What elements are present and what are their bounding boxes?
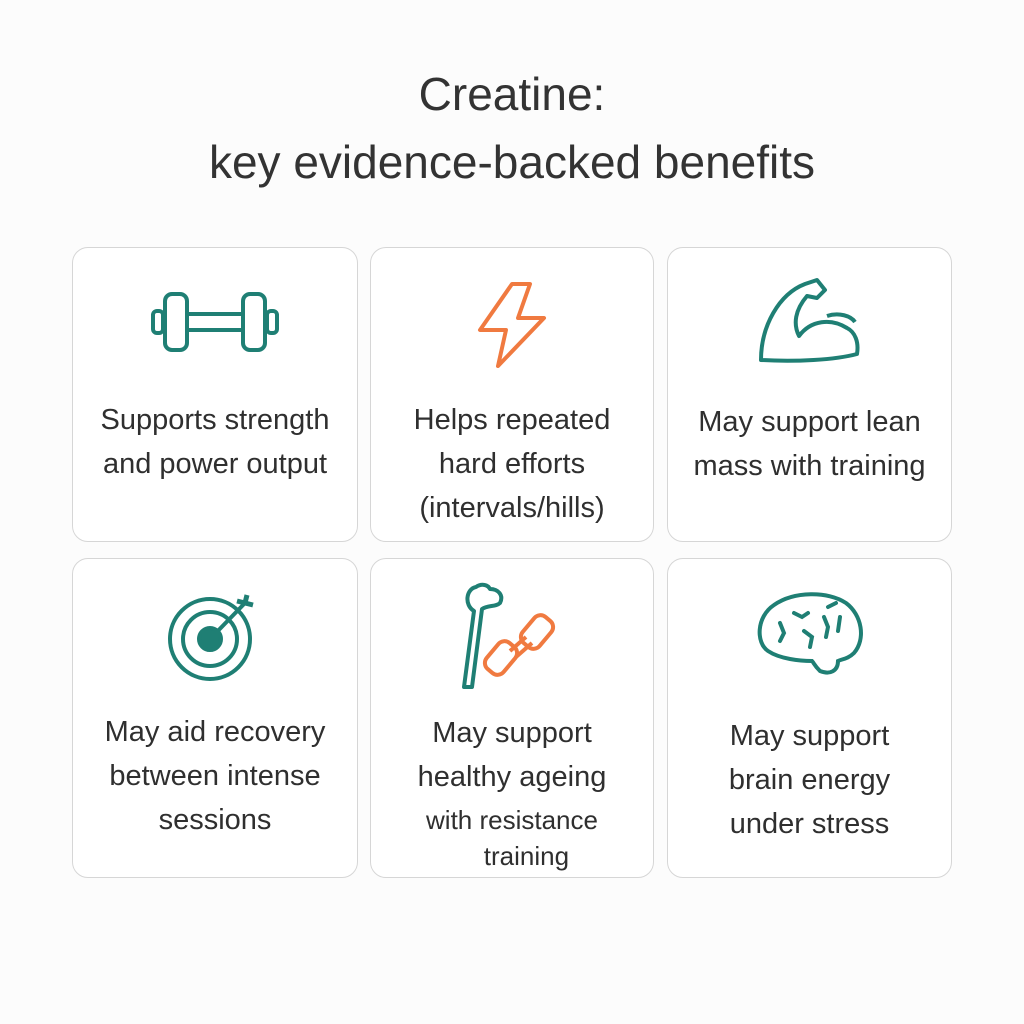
text: Supports strength <box>101 404 329 436</box>
text: May support <box>432 717 592 749</box>
text: mass with training <box>693 450 926 482</box>
icon: target <box>168 594 254 681</box>
panel: healthy ageing: training <box>484 841 569 871</box>
text <box>414 404 610 524</box>
text: May support lean <box>698 406 921 438</box>
icon: dumbbell <box>151 292 279 352</box>
text: between intense <box>109 760 321 792</box>
text: May aid recovery <box>105 716 325 748</box>
title: key evidence-backed benefits <box>209 136 815 188</box>
text <box>418 717 606 793</box>
text: (intervals/hills) <box>419 492 605 524</box>
title <box>209 68 815 188</box>
text <box>693 406 926 482</box>
text: May support <box>730 720 889 752</box>
text: sessions <box>159 804 271 836</box>
icon: brain <box>758 592 863 675</box>
text <box>729 720 890 840</box>
title: Creatine: <box>419 68 605 120</box>
text: hard efforts <box>439 448 585 480</box>
icon: lightning <box>478 282 546 368</box>
panel: healthy ageing <box>370 558 654 878</box>
text: and power output <box>103 448 327 480</box>
text <box>105 716 326 836</box>
text: brain energy <box>729 764 890 796</box>
panel: strength <box>72 247 358 542</box>
panel: repeated efforts <box>370 247 654 542</box>
panel: recovery <box>72 558 358 878</box>
panel: brain <box>667 558 952 878</box>
icon: flexed arm <box>759 278 860 363</box>
icon: bone and dumbbell <box>462 582 556 689</box>
panel: healthy ageing: with resistance <box>426 805 598 835</box>
text: under stress <box>730 808 889 840</box>
text: healthy ageing <box>418 761 606 793</box>
panel: lean mass <box>667 247 952 542</box>
text: Helps repeated <box>414 404 610 436</box>
text <box>101 404 329 480</box>
